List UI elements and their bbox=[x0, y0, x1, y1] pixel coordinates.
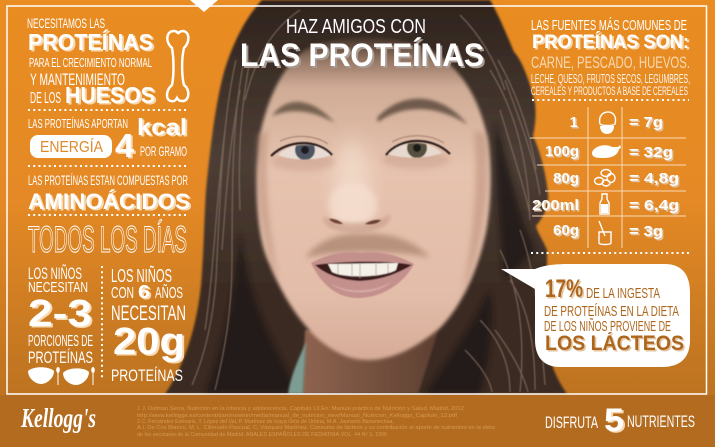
references: 1 J. Dalmau Serra. Nutrición en la infancia y adolescencia. Capítulo 13.En: Manual práctico de Nutrición y Salud. Madrid, 2012 bbox=[137, 406, 464, 412]
energía label: ENERGÍA bbox=[40, 137, 103, 156]
amino heading: LAS PROTEÍNAS ESTAN COMPUESTAS POR bbox=[28, 173, 188, 188]
neck bbox=[302, 325, 440, 394]
upper lip shadow bbox=[305, 234, 430, 258]
row: yogurt bbox=[553, 221, 663, 244]
disfruta 5 nutrientes: DISFRUTA bbox=[545, 413, 598, 432]
los niños: LOS NIÑOS bbox=[111, 265, 172, 286]
hair: dark lower locks bbox=[205, 120, 535, 394]
row: yogurt: = 3g bbox=[629, 223, 663, 240]
proteínas label: PROTEÍNAS bbox=[111, 366, 183, 385]
divider bbox=[532, 99, 689, 101]
face side shading bbox=[257, 130, 488, 295]
kcal: kcal bbox=[137, 114, 187, 140]
mouth bbox=[311, 252, 414, 298]
table grid bbox=[530, 107, 686, 248]
porciones de: PORCIONES DE bbox=[28, 333, 93, 350]
panel: sources bbox=[531, 17, 690, 98]
right eyebrow bbox=[377, 99, 468, 125]
title bbox=[240, 16, 484, 73]
hair: lighter strands bbox=[192, 10, 545, 392]
title line 2: LAS PROTEÍNAS bbox=[240, 37, 484, 73]
photo: smiling girl bbox=[165, 0, 567, 394]
aminoácidos word: AMINOÁCIDOS bbox=[28, 189, 190, 214]
disfruta 5 nutrientes: 5 bbox=[604, 402, 624, 438]
row: yogurt: 60g bbox=[553, 222, 579, 239]
row: milk bottle bbox=[532, 194, 679, 214]
por gramo: POR GRAMO bbox=[140, 143, 187, 159]
kellogg's logo: Kellogg's bbox=[20, 403, 96, 433]
divider bbox=[531, 252, 689, 254]
callout line 1: DE LA INGESTA bbox=[586, 286, 660, 302]
energy heading: LAS PROTEÍNAS APORTAN bbox=[28, 116, 128, 131]
right eye bbox=[386, 136, 450, 158]
proteínas son: PROTEÍNAS SON: bbox=[532, 31, 689, 53]
notch marker bbox=[190, 0, 218, 12]
row: egg bbox=[570, 112, 663, 134]
necesitan: NECESITAN bbox=[111, 302, 186, 325]
años: AÑOS bbox=[155, 282, 183, 302]
row: milk bottle: 200ml bbox=[532, 197, 579, 214]
number 4: 4 bbox=[115, 127, 135, 164]
los lácteos: LOS LÁCTEOS bbox=[545, 332, 684, 355]
divider bbox=[28, 165, 188, 167]
left eye socket bbox=[271, 153, 335, 171]
todos los días: TODOS LOS DÍAS bbox=[28, 219, 187, 260]
panel: energy bbox=[28, 114, 187, 164]
speech bubble bbox=[501, 264, 690, 367]
huesos word: HUESOS bbox=[65, 82, 155, 108]
table: protein per food bbox=[530, 107, 686, 248]
six: 6 bbox=[138, 282, 150, 302]
nose bbox=[324, 183, 390, 233]
hair bbox=[165, 0, 567, 394]
cheek highlight bbox=[334, 139, 370, 231]
references: 2 C. Fernández Estívariz, T. López del Val, P. Martínez de Icaya Ortiz de Urbina, M.A. Jaunsolo Barrenechea, bbox=[137, 419, 394, 425]
20g number: 20g bbox=[113, 321, 185, 363]
row: nuts bbox=[553, 170, 679, 187]
face bbox=[257, 38, 490, 360]
energía pill bbox=[30, 135, 112, 158]
maintenance text: Y MANTENIMIENTO bbox=[30, 70, 125, 89]
row: milk bottle: = 6,4g bbox=[629, 197, 679, 214]
los niños: LOS NIÑOS bbox=[28, 264, 82, 283]
con: CON bbox=[111, 285, 134, 302]
bones heading: NECESITAMOS LAS bbox=[27, 15, 105, 31]
panel: servings bbox=[28, 264, 95, 385]
icon: bowls and spoons bbox=[28, 367, 95, 385]
necesitan: NECESITAN bbox=[28, 280, 88, 296]
references: A.I. De Cos Blanco, M. L. Cilleruelo Pascual, C. Vázquez Martínez. Consumo de lácteos y su contribución al aporte de nutrientes en la dieta bbox=[137, 425, 495, 431]
left eye bbox=[271, 136, 332, 160]
vertical divider bbox=[101, 266, 103, 380]
shirt bbox=[288, 342, 306, 394]
row: chicken: 100g bbox=[545, 143, 579, 160]
title line 1: HAZ AMIGOS CON bbox=[286, 16, 426, 38]
row: chicken bbox=[545, 143, 673, 161]
disfruta 5 nutrientes bbox=[545, 402, 695, 438]
divider bbox=[28, 109, 188, 111]
footer band bbox=[0, 395, 715, 447]
panel: bones bbox=[27, 15, 188, 108]
de los: DE LOS bbox=[30, 90, 61, 107]
row: chicken: = 32g bbox=[629, 144, 673, 161]
right eye socket bbox=[382, 151, 450, 169]
references: de los escolares de la Comunidad de Madrid. ANALES ESPAÑOLES DE PEDIATRIA.VOL. 44 Nº 3, 1996 bbox=[137, 431, 387, 438]
references: http://www.kelloggs.es/content/dam/newton/media/manual_de_nutricion_new/Manual_Nutricion_Kelloggs_Capitulo_13.pdf bbox=[137, 413, 458, 419]
row: nuts: 80g bbox=[553, 170, 579, 187]
growth text: PARA EL CRECIMIENTO NORMAL bbox=[29, 56, 152, 70]
references bbox=[137, 406, 495, 438]
17 percent: 17% bbox=[545, 275, 583, 303]
row: egg: = 7g bbox=[629, 114, 663, 131]
icon: bone bbox=[167, 31, 188, 101]
2-3 number: 2-3 bbox=[28, 293, 92, 335]
callout: dairy bbox=[501, 264, 690, 367]
panel: amino acids bbox=[28, 173, 190, 214]
proteínas label: PROTEÍNAS bbox=[28, 348, 93, 367]
left eyebrow bbox=[272, 102, 335, 123]
proteínas word: PROTEÍNAS bbox=[28, 28, 153, 55]
divider bbox=[28, 214, 188, 216]
row: nuts: = 4,8g bbox=[629, 170, 679, 187]
row: egg: 1 bbox=[570, 114, 578, 131]
panel: six years bbox=[111, 265, 186, 385]
